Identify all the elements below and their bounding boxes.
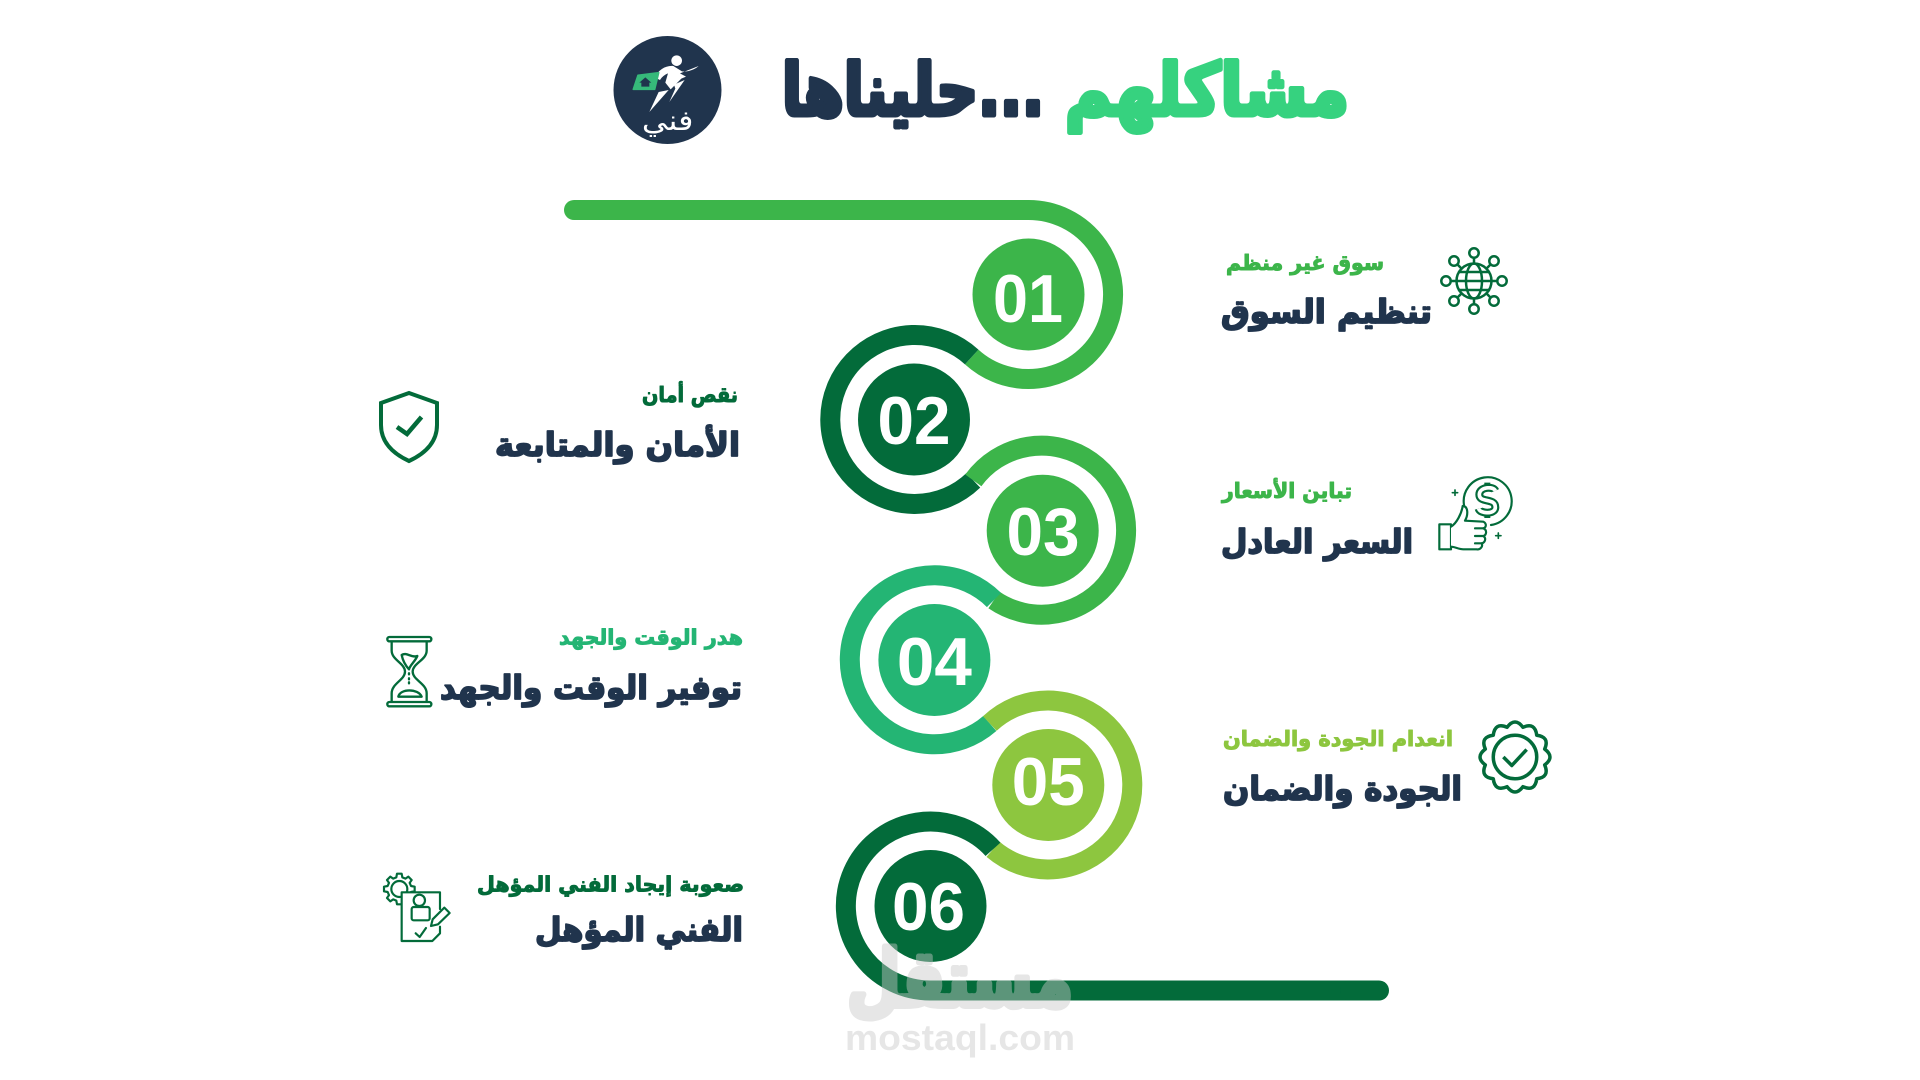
timeline path (574, 210, 1379, 991)
logo: fanni runner badge: فني (642, 104, 693, 137)
segment 04 (850, 575, 994, 744)
item 05 text (1223, 727, 1462, 809)
item 02 text: نقص أمان (642, 380, 738, 407)
icon: thumbs up coin (1439, 477, 1512, 549)
logo: fanni runner badge (614, 36, 722, 144)
segment 01 (590, 210, 1113, 379)
step circle 06 (874, 850, 986, 962)
item 03 text (1221, 477, 1413, 562)
start bar cap (574, 200, 600, 220)
step circle 04: 04 (897, 624, 972, 700)
icon: gear and profile document (384, 874, 450, 941)
segment 06 (846, 822, 1360, 991)
title: green part: مشاكلهم (1065, 48, 1349, 133)
item 04 text: توفير الوقت والجهد (440, 668, 742, 708)
item 01 text: سوق غير منظم (1226, 251, 1384, 275)
item 05 text: الجودة والضمان (1223, 769, 1462, 809)
item 04 text (440, 626, 743, 708)
item 01 text: تنظيم السوق (1221, 292, 1432, 332)
icon: hourglass (387, 637, 431, 706)
icon: globe network (1441, 248, 1507, 314)
step circle 05: 05 (1012, 744, 1085, 820)
step circle 02: 02 (878, 383, 950, 459)
step circle 04 (878, 604, 990, 716)
end bar cap (1350, 980, 1379, 1000)
segment 05 (990, 700, 1132, 869)
step circle 02 (858, 364, 970, 476)
segment 02 (830, 335, 973, 504)
icon: quality badge (1480, 722, 1550, 792)
title: navy part: ...حليناها (782, 48, 1044, 132)
step circle 05 (992, 729, 1104, 841)
item 03 text: تباين الأسعار (1221, 477, 1352, 503)
item 02 text: الأمان والمتابعة (495, 424, 740, 465)
step circle 01 (972, 238, 1084, 350)
icon: shield check (381, 393, 437, 461)
watermark: mostaql: mostaql.com (845, 1017, 1075, 1058)
step circle 01: 01 (993, 261, 1063, 337)
item 04 text: هدر الوقت والجهد (559, 626, 743, 650)
item 06 text: الفني المؤهل (535, 910, 743, 950)
item 01 text (1221, 251, 1432, 332)
step circle 06: 06 (892, 869, 965, 945)
item 06 text: صعوبة إيجاد الفني المؤهل (477, 872, 744, 896)
item 06 text (477, 872, 744, 950)
watermark: mostaql (845, 935, 1075, 1058)
title (782, 48, 1349, 133)
step circle 03 (987, 475, 1099, 587)
item 02 text (495, 380, 740, 465)
step circle 03: 03 (1006, 494, 1080, 570)
item 03 text: السعر العادل (1221, 522, 1413, 562)
watermark: mostaql: مستقل (847, 935, 1073, 1025)
segment 03 (973, 446, 1126, 615)
item 05 text: انعدام الجودة والضمان (1223, 727, 1453, 751)
